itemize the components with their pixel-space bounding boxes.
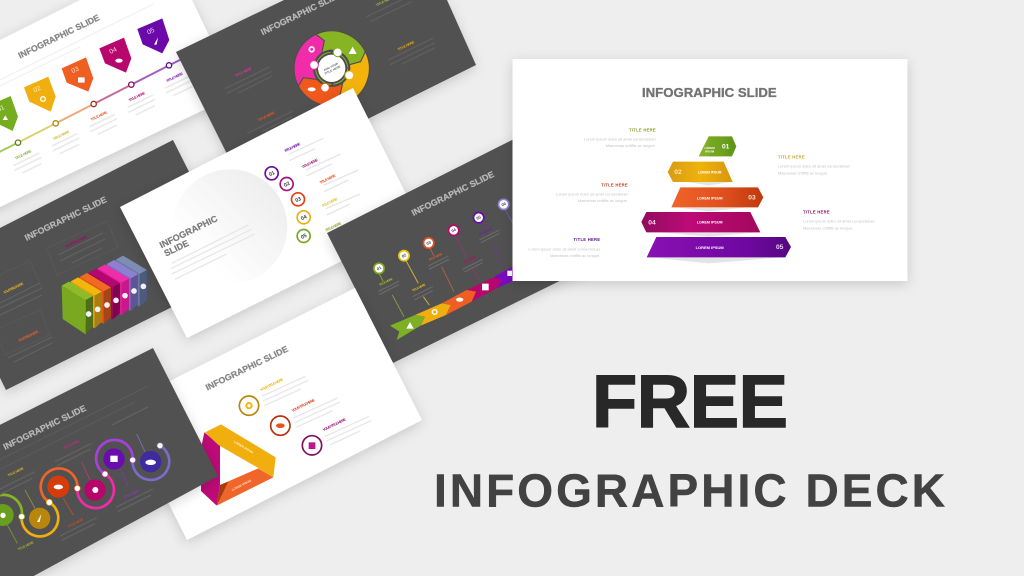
- labels: TITLE HERE: [257, 110, 276, 122]
- wave path: [0, 440, 169, 536]
- label 05: [528, 237, 601, 258]
- pyramid level 05: 05: [776, 244, 784, 251]
- tags 01 to 05: 02: [32, 85, 42, 94]
- ribbon arrows: [390, 264, 517, 340]
- label 01: Lorem ipsum dolor sit amet consectetuer: [584, 136, 657, 141]
- frame labels and lines: YOUR TITLE HERE: [18, 329, 40, 343]
- slide title: INFOGRAPHIC SLIDE: [23, 194, 108, 243]
- donut icons: [308, 47, 357, 91]
- ring labels: TITLE HERE: [319, 173, 337, 185]
- faint text lines: [0, 386, 148, 472]
- label 01: TITLE HERE: [629, 127, 656, 132]
- label 04: [803, 210, 876, 230]
- label 02: Lorem ipsum dolor sit amet consectetuer: [778, 164, 851, 169]
- label 04: TITLE HERE: [803, 210, 830, 215]
- pin labels: TITLE HERE: [462, 255, 477, 265]
- pyramid level 03: LOREM IPSUM: [697, 197, 723, 201]
- ring icons: [246, 403, 315, 449]
- column labels: TITLE HERE: [52, 130, 71, 141]
- frame labels and lines: YOUR TITLE HERE: [3, 281, 25, 295]
- pyramid level 03: [671, 187, 763, 207]
- ring labels: TITLE HERE: [321, 197, 339, 208]
- slide: triangle (white, bottom): [120, 288, 422, 540]
- Penrose triangle: LOREM IPSUM: [233, 440, 254, 455]
- timeline line: [0, 55, 190, 153]
- ring labels: YOUR TITLE HERE: [259, 377, 284, 392]
- pin numbers: 02: [401, 252, 408, 259]
- label 05: Maecenas cnfiffis ac lungue.: [550, 253, 600, 258]
- coloured discs: [0, 448, 161, 529]
- block badges: [86, 283, 146, 317]
- pyramid level 02: [668, 162, 733, 182]
- slide title: INFOGRAPHIC SLIDE: [410, 169, 496, 218]
- label 02: TITLE HERE: [778, 155, 805, 160]
- ring labels: TITLE HERE: [301, 158, 319, 169]
- pyramid level 05: LOREM IPSUM: [696, 245, 724, 250]
- ring labels: [259, 377, 347, 432]
- ring numbers: 05: [300, 233, 308, 241]
- labels: TITLE HERE: [63, 439, 81, 450]
- label 04: Lorem ipsum dolor sit amet consectetuer: [803, 219, 876, 224]
- label 05: Lorem ipsum dolor sit amet consectetuer: [528, 246, 601, 251]
- label 03: Lorem ipsum dolor sit amet consectetuer: [556, 191, 629, 196]
- frame labels and lines: YOUR TITLE HERE: [65, 235, 89, 249]
- column labels: TITLE HERE: [90, 110, 108, 122]
- pin numbers: 05: [476, 214, 482, 221]
- labels: [234, 0, 416, 122]
- ring labels: YOUR TITLE HERE: [291, 398, 316, 413]
- pale disc: [173, 169, 287, 284]
- pin text lines: [378, 230, 499, 300]
- body text lines: [171, 225, 255, 279]
- ring numbers: 04: [300, 214, 308, 222]
- label 04: Maecenas cnfiffis ac lungue.: [803, 225, 853, 230]
- column labels: TITLE HERE: [14, 149, 33, 161]
- ring labels: YOUR TITLE HERE: [322, 417, 347, 432]
- pyramid level 04: LOREM IPSUM: [697, 221, 723, 225]
- slide: 3D blocks (dark, left): [0, 140, 240, 390]
- stems: [379, 209, 520, 317]
- main slide title: INFOGRAPHIC SLIDE: [642, 85, 777, 100]
- label 01: [584, 127, 657, 148]
- donut hub: ADD YOUR: [323, 61, 340, 72]
- labels: TITLE HERE: [67, 517, 85, 529]
- label 03: [556, 182, 629, 203]
- text frames: [0, 221, 118, 355]
- column labels: TITLE HERE: [166, 72, 184, 83]
- column labels: [14, 72, 184, 161]
- pyramid level 04: 04: [648, 219, 656, 226]
- ring numbers: 01: [268, 170, 276, 178]
- stems: [7, 434, 145, 543]
- labels: TITLE HERE: [17, 540, 35, 552]
- labels: TITLE HERE: [123, 488, 141, 500]
- hub badges: [310, 48, 354, 92]
- timeline nodes: [15, 63, 172, 145]
- label 02: [778, 155, 851, 175]
- tags 01 to 05: [0, 18, 169, 131]
- labels: TITLE HERE: [397, 40, 416, 52]
- pyramid level 01: LOREM: [705, 146, 715, 150]
- donut hub: [313, 50, 350, 87]
- pin labels: TITLE HERE: [378, 277, 393, 287]
- slide: circular cycle (dark, top): [176, 0, 476, 182]
- ring labels: [284, 142, 343, 233]
- junction badges: [19, 443, 163, 520]
- label text lines: [262, 376, 372, 445]
- pin labels: [378, 227, 493, 293]
- tags 01 to 05: 04: [108, 46, 118, 56]
- slide: ribbon timeline (dark, right): [327, 136, 590, 363]
- pins: [374, 199, 509, 273]
- 3D books: [62, 256, 147, 334]
- slide title: SLIDE: [162, 238, 190, 258]
- pyramid level 04: [641, 212, 760, 232]
- label 03: Maecenas cnfiffis ac lungue.: [578, 198, 628, 203]
- label 03: TITLE HERE: [601, 182, 628, 187]
- label 05: TITLE HERE: [573, 237, 600, 242]
- label text lines: [0, 407, 153, 540]
- column text lines: [14, 76, 193, 173]
- label 01: Maecenas cnfiffis ac lungue.: [606, 143, 656, 148]
- label text lines: [225, 0, 435, 133]
- tags 01 to 05: 05: [146, 27, 156, 36]
- numbered rings: [265, 167, 310, 242]
- pyramid shadows: [647, 182, 785, 263]
- donut hub: TITLE HERE: [324, 65, 341, 76]
- heading: FREE: FREE: [592, 360, 788, 443]
- pin labels: TITLE HERE: [428, 252, 443, 262]
- pin numbers: 03: [426, 239, 432, 246]
- labels: TITLE HERE: [7, 466, 25, 478]
- icon rings: [239, 396, 322, 455]
- slide title: INFOGRAPHIC SLIDE: [204, 344, 290, 392]
- label text lines: [289, 138, 360, 215]
- pyramid level 01: [699, 136, 736, 156]
- ring labels: TITLE HERE: [284, 142, 302, 153]
- pin numbers: [376, 201, 507, 271]
- pyramid level 05: [647, 237, 791, 257]
- ring numbers: 02: [283, 181, 291, 189]
- disc icons: [0, 456, 156, 522]
- ribbon icons: [406, 271, 512, 329]
- pyramid level 03: 03: [748, 195, 756, 202]
- tags 01 to 05: 03: [70, 65, 80, 75]
- pin numbers: 04: [451, 227, 457, 233]
- pin numbers: 06: [501, 201, 507, 207]
- pin numbers: 01: [376, 265, 383, 271]
- label 02: Maecenas cnfiffis ac lungue.: [778, 170, 828, 175]
- faint subtitle lines: [0, 4, 153, 86]
- heading: INFOGRAPHIC DECK: INFOGRAPHIC DECK: [434, 464, 945, 516]
- pyramid level 01: IPSUM: [705, 150, 715, 154]
- main slide: pyramid: [512, 59, 908, 281]
- pin labels: TITLE HERE: [411, 283, 426, 293]
- slide title: INFOGRAPHIC SLIDE: [16, 12, 101, 60]
- slide: numbered circles (white, centre): [120, 88, 420, 338]
- ring labels: TITLE HERE: [325, 221, 343, 233]
- Penrose triangle: [201, 424, 276, 506]
- slide title: INFOGRAPHIC: [158, 213, 220, 250]
- ring numbers: 03: [294, 196, 302, 204]
- pyramid level 02: 02: [674, 169, 682, 176]
- Penrose triangle: LOREM IPSUM: [231, 478, 252, 492]
- labels: [7, 439, 141, 552]
- labels: TITLE HERE: [234, 66, 253, 78]
- pyramid level 01: 01: [722, 144, 730, 151]
- slide: timeline tags (white, top left): [0, 0, 237, 237]
- ring numbers: [268, 170, 308, 241]
- pin labels: TITLE HERE: [478, 227, 493, 237]
- column labels: TITLE HERE: [128, 91, 146, 103]
- donut segments: [294, 31, 369, 106]
- frame labels and lines: [0, 233, 105, 362]
- slide: wave path (dark, bottom left): [0, 348, 218, 576]
- slide title: INFOGRAPHIC SLIDE: [1, 403, 88, 452]
- pyramid level 02: LOREM IPSUM: [698, 171, 722, 175]
